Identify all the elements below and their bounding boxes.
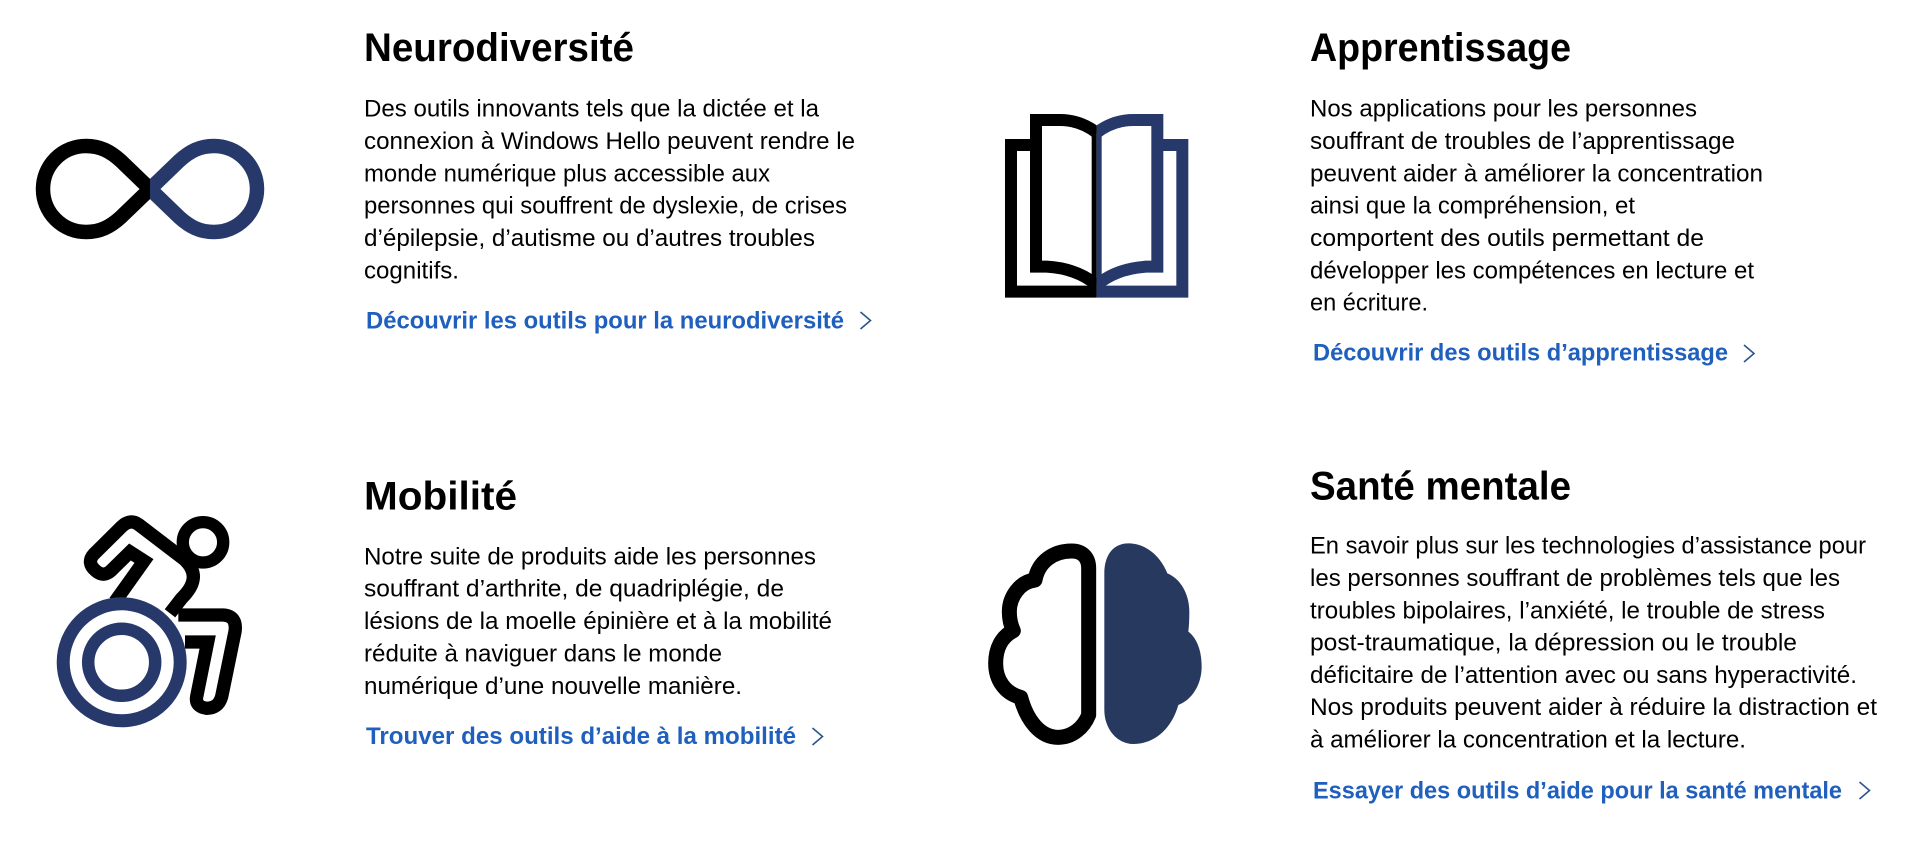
text block: Santé mentale description: Nos produits peuvent aider à réduire la distraction et [1310, 694, 1877, 721]
text block: Mobilité description: Notre suite de produits aide les personnes [364, 543, 816, 570]
heading: Apprentissage: Apprentissage [1310, 26, 1571, 70]
link: Découvrir les outils pour la neurodiversité: Découvrir les outils pour la neurodiversité [366, 307, 844, 334]
text block: Neurodiversité description: Des outils innovants tels que la dictée et la [364, 96, 820, 123]
text block: Neurodiversité description: cognitifs. [364, 257, 459, 284]
text block: Apprentissage description [1310, 96, 1763, 317]
panel: Santé mentale [996, 464, 1877, 804]
text block: Apprentissage description: comportent des outils permettant de [1310, 225, 1704, 252]
text block: Santé mentale description: déficitaire de l’attention avec ou sans hyperactivité. [1310, 662, 1857, 689]
text block: Apprentissage description: ainsi que la compréhension, et [1310, 193, 1635, 220]
text block: Apprentissage description: en écriture. [1310, 290, 1428, 317]
heading: Mobilité: Mobilité [364, 474, 517, 518]
link: Découvrir des outils d'apprentissage: Découvrir des outils d’apprentissage [1313, 340, 1728, 367]
text block: Mobilité description: souffrant d’arthrite, de quadriplégie, de [364, 576, 784, 603]
text block: Neurodiversité description: personnes qui souffrent de dyslexie, de crises [364, 192, 847, 220]
text block: Mobilité description [364, 543, 832, 700]
panel: Apprentissage [1011, 26, 1763, 367]
text block: Apprentissage description: développer les compétences en lecture et [1310, 257, 1754, 284]
text block: Neurodiversité description: d’épilepsie, d’autisme ou d’autres troubles [364, 225, 815, 252]
text block: Santé mentale description: En savoir plus sur les technologies d’assistance pour [1310, 532, 1866, 559]
text block: Santé mentale description: à améliorer la concentration et la lecture. [1310, 727, 1746, 754]
panel: Neurodiversité [43, 26, 870, 334]
link: Essayer des outils d'aide pour la santé mentale: Essayer des outils d’aide pour la santé mentale [1313, 777, 1842, 804]
heading: Santé mentale: Santé mentale [1310, 464, 1571, 508]
icon: brain [996, 543, 1202, 744]
heading: Neurodiversité: Neurodiversité [364, 26, 634, 70]
icon: active wheelchair [63, 522, 235, 721]
text block: Santé mentale description: les personnes souffrant de problèmes tels que les [1310, 565, 1840, 592]
panel: Mobilité [63, 474, 832, 750]
text block: Neurodiversité description: connexion à Windows Hello peuvent rendre le [364, 128, 855, 155]
text block: Apprentissage description: peuvent aider à améliorer la concentration [1310, 160, 1763, 187]
icon: infinity symbol [43, 146, 257, 232]
text block: Mobilité description: lésions de la moelle épinière et à la mobilité [364, 608, 832, 635]
text block: Apprentissage description: souffrant de troubles de l’apprentissage [1310, 128, 1735, 155]
text block: Neurodiversité description [364, 96, 855, 284]
text block: Mobilité description: numérique d’une nouvelle manière. [364, 673, 742, 700]
text block: Santé mentale description: troubles bipolaires, l’anxiété, le trouble de stress [1310, 597, 1825, 624]
text block: Santé mentale description: post-traumatique, la dépression ou le trouble [1310, 630, 1797, 657]
text block: Apprentissage description: Nos applications pour les personnes [1310, 96, 1697, 123]
text block: Santé mentale description [1310, 532, 1877, 754]
link: Trouver des outils d'aide à la mobilité: Trouver des outils d’aide à la mobilité [366, 723, 796, 750]
text block: Mobilité description: réduite à naviguer dans le monde [364, 640, 722, 667]
icon: open book [1011, 120, 1182, 297]
text block: Neurodiversité description: monde numérique plus accessible aux [364, 160, 770, 187]
